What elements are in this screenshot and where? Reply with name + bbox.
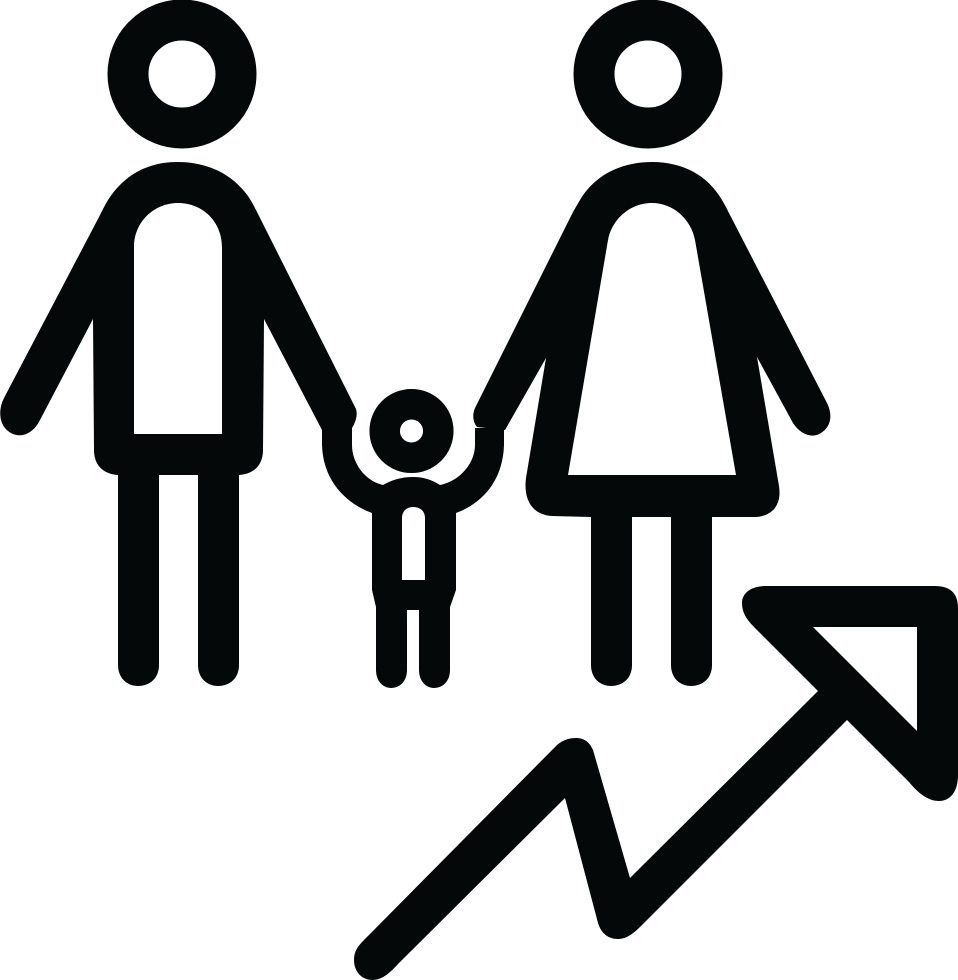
- icon: child: [322, 404, 504, 688]
- icon: father: [0, 20, 357, 686]
- icon: mother: [473, 20, 830, 686]
- icon: rising arrow: [354, 586, 958, 980]
